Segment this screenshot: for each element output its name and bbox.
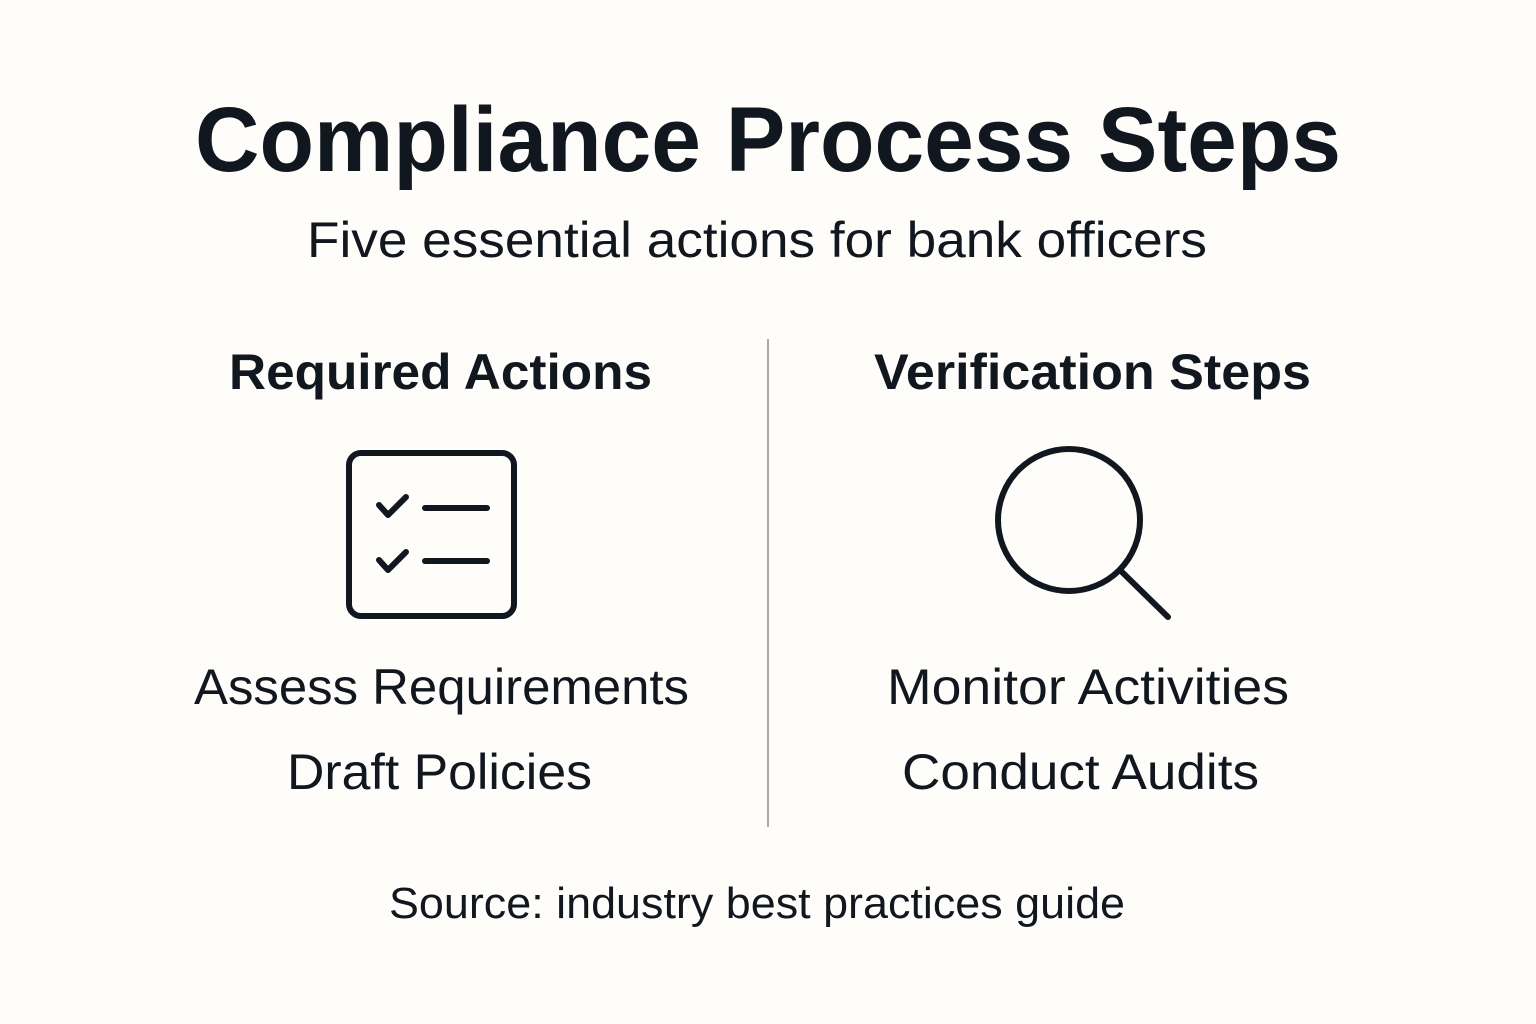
text: monitor activities: Monitor Activities	[887, 659, 1289, 715]
text: assess requirements: Assess Requirements	[194, 659, 689, 715]
panel: required actions	[194, 344, 689, 800]
text: draft policies: Draft Policies	[287, 744, 592, 800]
icon: magnifying glass	[998, 449, 1168, 617]
subtitle: Five essential actions for bank officers	[307, 212, 1207, 268]
icon: checklist	[349, 453, 514, 616]
title: Compliance Process Steps	[195, 89, 1341, 191]
text: conduct audits: Conduct Audits	[902, 744, 1259, 800]
source note: Source: industry best practices guide	[389, 879, 1125, 928]
panel: verification steps	[874, 344, 1311, 800]
heading: required actions: Required Actions	[229, 344, 652, 400]
heading: verification steps: Verification Steps	[874, 344, 1311, 400]
divider between columns	[767, 339, 769, 827]
